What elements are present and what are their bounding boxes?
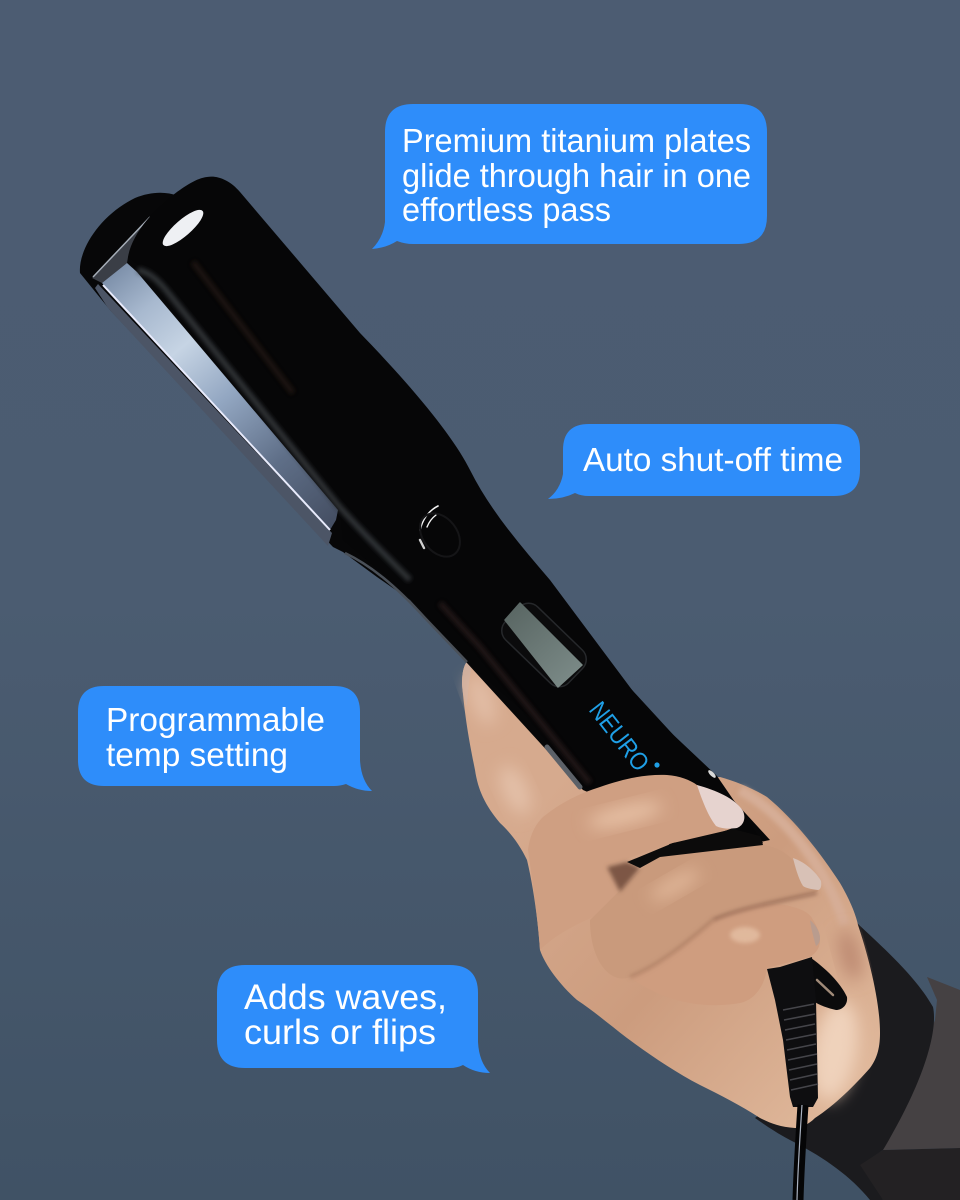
hang loop (811, 958, 847, 1010)
hand: palm and thumb (462, 658, 880, 1128)
bubble text: Adds waves, (244, 978, 447, 1017)
bubble text: Programmable (106, 701, 325, 738)
speech bubble: titanium plates (372, 104, 767, 249)
speech bubble: waves curls flips (217, 965, 490, 1073)
LCD bezel (496, 598, 592, 692)
ring finger (630, 904, 820, 1005)
bubble text: Premium titanium plates (402, 122, 751, 159)
power cord (797, 1105, 803, 1200)
bubble text: Auto shut-off time (583, 441, 843, 478)
cord strain relief (767, 957, 818, 1107)
flat iron (80, 177, 770, 870)
sleeve and cuff (755, 923, 960, 1200)
titanium plate (102, 263, 338, 530)
index finger (528, 775, 743, 950)
lower jaw (80, 193, 770, 850)
speech bubble: auto shut-off (548, 424, 860, 499)
lower lip reflection (440, 603, 590, 783)
LCD screen (505, 603, 582, 687)
heel of hand (805, 997, 865, 1103)
middle finger (590, 845, 820, 978)
plate frame (92, 216, 150, 283)
skin highlights (586, 797, 664, 833)
lower arm highlight (345, 553, 467, 662)
plate edge highlight (103, 285, 330, 530)
bubble text: glide through hair in one (402, 157, 751, 194)
housing lip (138, 270, 410, 580)
bubble text: curls or flips (244, 1013, 436, 1052)
speech bubble: programmable temp (78, 686, 372, 791)
upper housing (128, 177, 763, 870)
web shadow between fingers (607, 862, 640, 892)
middle nail (793, 858, 821, 890)
thumb nail (462, 658, 474, 707)
index nail (697, 785, 744, 829)
lower frame strip (95, 284, 332, 546)
iron gap between fingers (627, 829, 763, 868)
button highlight (707, 769, 717, 779)
ring nail (810, 920, 820, 946)
warm reflection (193, 262, 293, 393)
handle arm segment (547, 747, 580, 787)
bubble text: effortless pass (402, 191, 611, 228)
hand: fingers (528, 775, 821, 1005)
finger creases (713, 893, 817, 920)
logo dot (654, 762, 660, 768)
NEURO logo: NEURO (583, 696, 655, 777)
hinge dimple (412, 506, 468, 564)
specular highlight (158, 205, 208, 251)
outer palm light (740, 790, 845, 925)
bubble text: temp setting (106, 736, 288, 773)
